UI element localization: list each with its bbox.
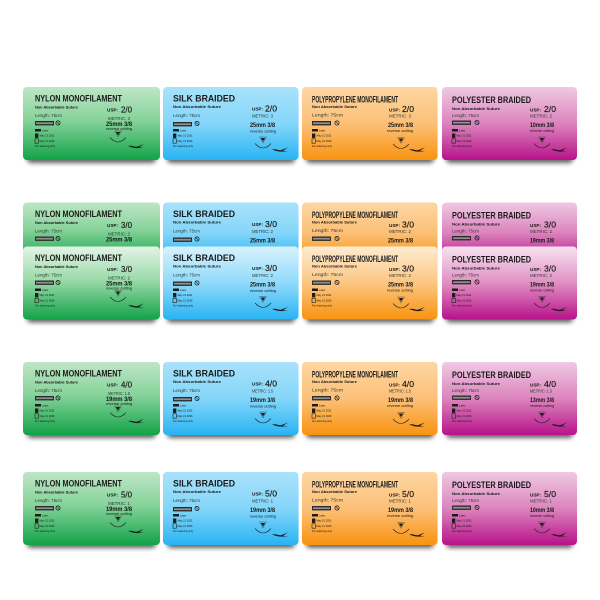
card: nylon 4/0: reverse cutting (106, 402, 132, 406)
card: nylon 4/0: USP: (107, 383, 118, 388)
card: nylon 5/0: Length: 75cm (35, 498, 62, 503)
card: polypropylene 3/0 back: 3/0 (402, 220, 414, 230)
card: silk 5/0: Latex (180, 514, 187, 518)
card: polypropylene 4/0: For learning only (312, 419, 333, 423)
row 3: size 4/0 (23, 362, 577, 438)
card: nylon 4/0: METRIC: 1.5 (108, 391, 130, 396)
card: polyester 4/0: POLYESTER BRAIDED (452, 370, 531, 381)
card: polypropylene 4/0: USP: (389, 383, 400, 388)
card: silk 3/0 front: SILK BRAIDED (173, 253, 235, 264)
card: polypropylene 4/0: Length: 75cm (312, 388, 343, 392)
card: nylon 4/0: 4/0 (121, 380, 132, 390)
card: polyester 3/0 front: Non Absorbable Suture (452, 266, 501, 270)
card: polyester 2/0: May 21 2021 (456, 134, 472, 138)
card: nylon 4/0 (23, 362, 160, 438)
card: nylon 2/0 (23, 87, 160, 163)
card: nylon 4/0: Latex (42, 404, 49, 408)
card: polyester 5/0: METRIC: 1 (530, 499, 552, 504)
card: silk 2/0: Length: 75cm (173, 113, 200, 118)
card: polyester 5/0: reverse cutting (530, 514, 554, 518)
card: polypropylene 4/0: METRIC: 1.5 (389, 389, 411, 394)
card: silk 5/0: USP: (252, 492, 263, 497)
card: nylon 5/0: Latex (42, 514, 49, 518)
card: silk 3/0 front: For learning only (173, 304, 194, 308)
card: nylon 4/0: May 21 2026 (40, 414, 55, 418)
card: polyester 3/0 front: 19mm 3/8 (530, 282, 555, 288)
card: nylon 3/0 front: May 21 2021 (40, 293, 55, 297)
card: polypropylene 2/0: Length: 75cm (312, 112, 343, 118)
card: polyester 4/0: Latex (459, 404, 466, 408)
card: polypropylene 5/0: Non Absorbable Suture (312, 489, 358, 494)
card: nylon 2/0: Length: 75cm (35, 113, 62, 118)
card: silk 5/0: METRIC: 1 (252, 499, 273, 504)
row 4: size 5/0 (23, 472, 577, 548)
card: polypropylene 5/0: Length: 75cm (312, 498, 343, 502)
row 2 back: size 3/0 (23, 202, 577, 262)
card: silk 3/0 front (163, 246, 298, 322)
card: polypropylene 2/0: USP: (389, 108, 400, 113)
card: polypropylene 3/0 front: Non Absorbable Suture (312, 264, 358, 268)
card: polypropylene 2/0: POLYPROPYLENE MONOFILAMENT (312, 95, 398, 106)
card: silk 4/0: reverse cutting (250, 404, 276, 408)
card: polyester 2/0: POLYESTER BRAIDED (452, 95, 531, 106)
card: polyester 3/0 front: reverse cutting (530, 288, 554, 292)
card: polyester 2/0: Non Absorbable Suture (452, 106, 501, 111)
card: polyester 5/0: For learning only (452, 529, 473, 533)
card: nylon 3/0 front: Latex (42, 288, 49, 292)
card: polypropylene 3/0 front: 3/0 (402, 264, 414, 274)
card: polyester 2/0: METRIC: 2 (530, 114, 552, 119)
card: polypropylene 3/0 back: POLYPROPYLENE MONOFILAMENT (312, 210, 398, 221)
card: polypropylene 4/0 (302, 362, 438, 438)
card: silk 4/0: 19mm 3/8 (250, 398, 276, 404)
card: polypropylene 3/0 back: Non Absorbable Suture (312, 220, 358, 224)
card: polyester 3/0 front: Length: 75cm (452, 272, 479, 278)
card: polyester 5/0: May 21 2026 (456, 524, 472, 528)
card: polyester 2/0 (442, 87, 577, 163)
card: polypropylene 4/0: POLYPROPYLENE MONOFILAMENT (312, 370, 398, 381)
card: polypropylene 5/0: USP: (389, 493, 400, 498)
card: nylon 3/0 back: Non Absorbable Suture (35, 220, 79, 225)
card: silk 2/0 (163, 87, 298, 163)
card: nylon 3/0 back: USP: (107, 223, 118, 228)
card: nylon 5/0: 5/0 (121, 490, 132, 500)
card: silk 4/0: Length: 75cm (173, 388, 200, 393)
card: polypropylene 5/0: POLYPROPYLENE MONOFILAMENT (312, 480, 398, 491)
card: polyester 4/0: reverse cutting (530, 404, 554, 408)
card: silk 2/0: SILK BRAIDED (173, 94, 235, 104)
card: polypropylene 2/0: Non Absorbable Suture (312, 104, 358, 109)
card: polyester 3/0 back: METRIC: 2 (530, 229, 552, 234)
card: silk 5/0: SILK BRAIDED (173, 478, 235, 490)
card: silk 4/0: USP: (252, 382, 263, 387)
card: silk 2/0: USP: (252, 107, 263, 112)
card: silk 5/0: May 21 2026 (178, 524, 193, 528)
card: polyester 3/0 front: 3/0 (544, 264, 556, 274)
card: nylon 4/0: May 21 2021 (40, 408, 55, 412)
card: polyester 3/0 back: 19mm 3/8 (530, 238, 555, 244)
card: nylon 2/0: May 21 2021 (40, 134, 55, 138)
card: polypropylene 2/0: 25mm 3/8 (388, 123, 414, 129)
card: polyester 3/0 back: 3/0 (544, 220, 556, 230)
card: nylon 2/0: 25mm 3/8 (106, 122, 133, 128)
card: nylon 2/0: METRIC: 3 (108, 116, 130, 121)
card: silk 5/0: Non Absorbable Suture (173, 489, 222, 494)
card: nylon 2/0: 2/0 (121, 105, 132, 115)
card: silk 3/0 front: METRIC: 2 (252, 273, 273, 278)
card: silk 4/0: May 21 2021 (178, 408, 193, 412)
card: nylon 5/0: Non Absorbable Suture (35, 490, 79, 494)
card: nylon 3/0 back: 25mm 3/8 (106, 238, 133, 244)
card: nylon 4/0: Length: 75cm (35, 388, 62, 393)
card: silk 5/0: reverse cutting (250, 514, 276, 518)
card: polyester 4/0: May 21 2026 (456, 414, 472, 418)
card: polyester 5/0 (442, 472, 577, 548)
card: silk 5/0: For learning only (173, 529, 194, 533)
card: silk 3/0 front: Latex (180, 288, 187, 292)
card: polypropylene 4/0: Latex (319, 404, 326, 408)
card: nylon 3/0 front: For learning only (35, 304, 56, 308)
card: nylon 5/0: For learning only (35, 529, 56, 533)
card: silk 3/0 back: METRIC: 2 (252, 229, 273, 234)
card: polypropylene 4/0: May 21 2021 (316, 408, 332, 412)
card: polypropylene 3/0 front: USP: (389, 267, 400, 272)
card: silk 2/0: Non Absorbable Suture (173, 104, 222, 109)
card: nylon 3/0 front: reverse cutting (106, 287, 132, 291)
card: polypropylene 2/0 (302, 87, 438, 163)
card: polypropylene 2/0: May 21 2026 (316, 139, 332, 143)
card: polypropylene 4/0: Non Absorbable Suture (312, 379, 358, 384)
card: polyester 5/0: Non Absorbable Suture (452, 491, 501, 496)
card: silk 3/0 front: USP: (252, 266, 263, 271)
card: nylon 2/0: Non Absorbable Suture (35, 104, 79, 110)
card: nylon 2/0: reverse cutting (106, 127, 132, 131)
card: polyester 2/0: Length: 75cm (452, 113, 479, 118)
card: polyester 4/0: METRIC: 1.5 (530, 389, 552, 394)
card: silk 3/0 back: USP: (252, 222, 263, 227)
card: polypropylene 3/0 front: 25mm 3/8 (388, 282, 414, 288)
card: polyester 2/0: May 21 2026 (456, 139, 472, 143)
card: polyester 5/0: Latex (459, 514, 466, 518)
card: polypropylene 3/0 back: USP: (389, 223, 400, 228)
card: nylon 5/0: May 21 2026 (40, 524, 55, 528)
card: nylon 3/0 back: METRIC: 2 (108, 232, 130, 236)
card: silk 3/0 front: reverse cutting (250, 289, 276, 293)
card: nylon 4/0: For learning only (35, 419, 56, 423)
card: silk 5/0: Length: 75cm (173, 498, 200, 503)
card: silk 2/0: For learning only (173, 144, 194, 148)
card: nylon 4/0: NYLON MONOFILAMENT (35, 369, 122, 380)
card: polypropylene 5/0: 5/0 (402, 489, 414, 499)
card: polypropylene 3/0 front: For learning only (312, 304, 333, 308)
card: nylon 2/0: For learning only (35, 144, 56, 148)
card: polypropylene 2/0: METRIC: 3 (389, 114, 411, 119)
card: polyester 2/0: reverse cutting (530, 129, 554, 133)
card: polyester 3/0 back: Non Absorbable Suture (452, 222, 501, 226)
card: silk 5/0: 19mm 3/8 (250, 508, 276, 514)
card: silk 3/0 back: Non Absorbable Suture (173, 220, 222, 224)
card: polypropylene 4/0: May 21 2026 (316, 414, 332, 418)
card: polyester 2/0: 10mm 3/8 (530, 123, 555, 129)
card: silk 3/0 back: SILK BRAIDED (173, 209, 235, 220)
card: silk 4/0: May 21 2026 (178, 414, 193, 418)
card: nylon 3/0 front: Non Absorbable Suture (35, 264, 79, 269)
card: polypropylene 3/0 front: POLYPROPYLENE MONOFILAMENT (312, 254, 398, 265)
card: polyester 5/0: Length: 75cm (452, 498, 479, 503)
card: nylon 5/0: May 21 2021 (40, 518, 55, 522)
card: nylon 3/0 back (23, 202, 160, 262)
card: polyester 3/0 front: For learning only (452, 304, 473, 308)
card: silk 3/0 back: Length: 75cm (173, 228, 200, 234)
card: polyester 5/0: 5/0 (544, 489, 556, 499)
card: polypropylene 5/0: For learning only (312, 529, 333, 533)
card: nylon 3/0 front: 3/0 (121, 264, 132, 274)
card: polyester 4/0: For learning only (452, 419, 473, 423)
card: polypropylene 3/0 back (302, 202, 438, 262)
card: silk 3/0 front: May 21 2021 (178, 293, 193, 297)
card: polypropylene 3/0 front: May 21 2021 (316, 293, 332, 297)
card: polyester 5/0: POLYESTER BRAIDED (452, 480, 531, 491)
card: nylon 5/0: USP: (107, 493, 118, 498)
card: polyester 5/0: USP: (530, 493, 541, 498)
card: silk 2/0: 2/0 (265, 104, 277, 114)
card: polyester 4/0: May 21 2021 (456, 408, 472, 412)
card: silk 3/0 front: 3/0 (265, 263, 277, 273)
card: silk 4/0: METRIC: 1.5 (252, 389, 273, 394)
card: polypropylene 2/0: May 21 2021 (316, 134, 332, 138)
card: nylon 3/0 front: Length: 75cm (35, 272, 62, 278)
card: polyester 3/0 back (442, 202, 577, 262)
card: polypropylene 3/0 back: 25mm 3/8 (388, 238, 414, 244)
card: polypropylene 5/0: May 21 2026 (316, 524, 332, 528)
card: silk 3/0 back: 3/0 (265, 219, 277, 229)
card: polyester 2/0: 2/0 (544, 104, 556, 114)
card: polypropylene 3/0 front: METRIC: 2 (389, 273, 411, 278)
card: polypropylene 5/0: May 21 2021 (316, 518, 332, 522)
card: nylon 3/0 back: Length: 75cm (35, 228, 62, 234)
card: nylon 5/0: METRIC: 1 (108, 501, 130, 506)
card: polyester 3/0 back: USP: (530, 223, 541, 228)
row 1: size 2/0 (23, 87, 577, 163)
card: polyester 4/0: USP: (530, 383, 541, 388)
card: nylon 3/0 front: USP: (107, 267, 118, 272)
card: silk 3/0 front: 25mm 3/8 (250, 282, 276, 288)
card: silk 2/0: 25mm 3/8 (250, 123, 276, 129)
card: polyester 4/0: 13mm 3/8 (530, 398, 555, 404)
card: polyester 5/0: May 21 2021 (456, 518, 472, 522)
card: polypropylene 5/0: Latex (319, 514, 326, 518)
card: polyester 4/0: 4/0 (544, 379, 556, 389)
card: polypropylene 5/0 (302, 472, 438, 548)
card: polyester 3/0 front: May 21 2026 (456, 298, 472, 302)
card: nylon 3/0 back: NYLON MONOFILAMENT (35, 209, 122, 220)
card: polyester 3/0 back: POLYESTER BRAIDED (452, 210, 531, 222)
card: silk 3/0 back (163, 202, 298, 262)
card: polypropylene 3/0 front (302, 246, 438, 322)
card: polypropylene 3/0 front: May 21 2026 (316, 298, 332, 302)
card: nylon 3/0 front (23, 246, 160, 322)
card: nylon 3/0 front: METRIC: 2 (108, 276, 130, 280)
card: silk 4/0: Latex (180, 404, 187, 408)
card: nylon 3/0 back: 3/0 (121, 220, 132, 230)
card: nylon 2/0: USP: (107, 108, 118, 113)
card: polyester 4/0: Length: 75cm (452, 388, 479, 393)
card: nylon 3/0 front: 25mm 3/8 (106, 282, 133, 288)
card: polypropylene 3/0 front: Length: 75cm (312, 272, 343, 277)
card: nylon 5/0: 19mm 3/8 (106, 507, 133, 513)
card: polypropylene 3/0 front: Latex (319, 288, 326, 292)
card: polyester 3/0 front (442, 246, 577, 322)
card: polypropylene 3/0 back: METRIC: 2 (389, 229, 411, 234)
card: silk 2/0: Latex (180, 128, 187, 132)
card: nylon 4/0: 19mm 3/8 (106, 397, 133, 403)
card: nylon 3/0 front: NYLON MONOFILAMENT (35, 253, 122, 264)
card: silk 4/0: Non Absorbable Suture (173, 379, 222, 384)
card: silk 5/0: 5/0 (265, 488, 277, 498)
card: nylon 5/0: NYLON MONOFILAMENT (35, 479, 122, 490)
card: silk 2/0: reverse cutting (250, 130, 276, 134)
card: silk 3/0 front: Non Absorbable Suture (173, 264, 222, 268)
card: polypropylene 5/0: METRIC: 1 (389, 499, 411, 504)
card: polypropylene 5/0: reverse cutting (387, 514, 413, 518)
card: polypropylene 3/0 front: reverse cutting (387, 288, 413, 292)
card: polyester 5/0: 10mm 3/8 (530, 508, 555, 514)
card: polyester 3/0 front: Latex (459, 288, 466, 292)
card: silk 4/0: SILK BRAIDED (173, 368, 235, 380)
card: silk 4/0 (163, 362, 298, 438)
card: polypropylene 4/0: reverse cutting (387, 404, 413, 408)
card: nylon 5/0 (23, 472, 160, 548)
card: silk 5/0 (163, 472, 298, 548)
card: silk 4/0: 4/0 (265, 378, 277, 388)
card: nylon 3/0 front: May 21 2026 (40, 298, 55, 302)
card: nylon 4/0: Non Absorbable Suture (35, 380, 79, 384)
card: silk 2/0: May 21 2026 (178, 139, 193, 143)
card: polypropylene 5/0: 19mm 3/8 (388, 508, 414, 514)
card: silk 3/0 front: May 21 2026 (178, 298, 193, 302)
card: polypropylene 2/0: 2/0 (402, 104, 414, 114)
card: silk 5/0: May 21 2021 (178, 518, 193, 522)
card: nylon 2/0: Latex (42, 128, 49, 132)
card: nylon 2/0: NYLON MONOFILAMENT (35, 94, 122, 105)
card: polyester 2/0: USP: (530, 108, 541, 113)
card: polyester 3/0 front: POLYESTER BRAIDED (452, 254, 531, 266)
card: polypropylene 2/0: Latex (319, 128, 326, 132)
row 2 front: size 3/0 (23, 246, 577, 322)
card: silk 2/0: METRIC: 3 (252, 114, 273, 119)
card: polyester 4/0: Non Absorbable Suture (452, 381, 501, 386)
card: polyester 3/0 back: Length: 75cm (452, 228, 479, 234)
card: polyester 2/0: Latex (459, 128, 466, 132)
card: polyester 2/0: For learning only (452, 144, 473, 148)
card: silk 3/0 front: Length: 75cm (173, 272, 200, 278)
card: nylon 5/0: reverse cutting (106, 512, 132, 516)
card: polypropylene 3/0 back: Length: 75cm (312, 228, 343, 233)
card: polypropylene 4/0: 4/0 (402, 379, 414, 389)
card: polyester 3/0 front: USP: (530, 267, 541, 272)
card: polyester 3/0 front: May 21 2021 (456, 293, 472, 297)
card: polyester 3/0 front: METRIC: 2 (530, 273, 552, 278)
card: polypropylene 2/0: reverse cutting (387, 129, 413, 133)
card: silk 3/0 back: 25mm 3/8 (250, 238, 276, 244)
card: nylon 2/0: May 21 2026 (40, 139, 55, 143)
card: silk 2/0: May 21 2021 (178, 134, 193, 138)
card: polypropylene 4/0: 19mm 3/8 (388, 398, 414, 404)
card: polyester 4/0 (442, 362, 577, 438)
card: silk 4/0: For learning only (173, 419, 194, 423)
card: polypropylene 2/0: For learning only (312, 144, 333, 148)
